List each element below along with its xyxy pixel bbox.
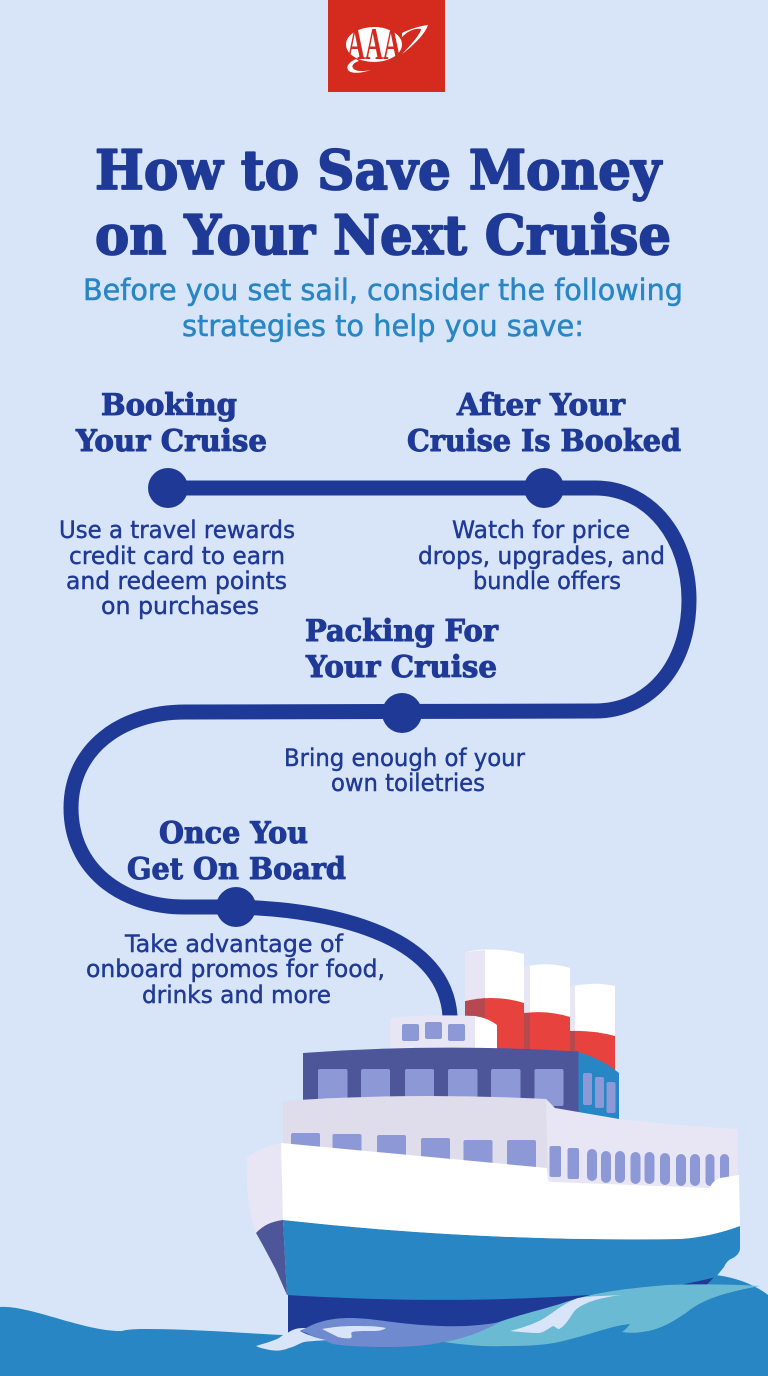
step 2: after your cruise is booked: Cruise Is Booked — [407, 423, 681, 458]
step 2: after your cruise is booked: Watch for price — [452, 516, 630, 544]
step 1: booking your cruise: Use a travel rewards — [59, 516, 295, 544]
subtitle: strategies to help you save: — [182, 309, 584, 343]
hull — [247, 1143, 740, 1340]
step 2: after your cruise is booked — [407, 387, 681, 595]
step 4: once you get on board: drinks and more — [142, 981, 331, 1009]
step 2: after your cruise is booked: bundle offers — [473, 567, 621, 595]
step 4: once you get on board: onboard promos for food, — [86, 955, 385, 983]
AAA logo: AAA — [347, 18, 401, 69]
AAA logo — [328, 0, 445, 92]
cruise ship — [247, 949, 740, 1340]
bridge cabin — [390, 1015, 497, 1050]
step 2: after your cruise is booked: drops, upgrades, and — [418, 542, 665, 570]
title: How to Save Money — [95, 138, 663, 202]
title — [95, 138, 671, 267]
step 3: packing for your cruise: Your Cruise — [305, 649, 497, 684]
step 4: once you get on board — [86, 815, 385, 1009]
step 1: booking your cruise: Your Cruise — [75, 423, 267, 458]
step 3: packing for your cruise: own toiletries — [331, 769, 485, 797]
step 4: once you get on board: Get On Board — [127, 851, 346, 886]
wave: teal — [444, 1284, 760, 1346]
promenade deck — [283, 1096, 738, 1190]
step 3: packing for your cruise: Packing For — [305, 613, 498, 648]
ocean waves — [0, 1275, 768, 1376]
wave: periwinkle — [301, 1318, 500, 1347]
subtitle: Before you set sail, consider the following — [83, 273, 683, 307]
step 4: once you get on board: Once You — [159, 815, 308, 850]
upper deck — [303, 1048, 619, 1120]
subtitle — [83, 273, 683, 343]
step 1: booking your cruise: and redeem points — [66, 567, 287, 595]
step 4: once you get on board: Take advantage of — [124, 930, 344, 958]
foam — [510, 1295, 622, 1333]
step 1: booking your cruise: credit card to earn — [69, 542, 285, 570]
step 1: booking your cruise: Booking — [101, 387, 237, 422]
step 3: packing for your cruise — [284, 613, 525, 797]
funnels — [465, 949, 615, 1075]
title: on Your Next Cruise — [95, 203, 671, 267]
step 1: booking your cruise — [59, 387, 295, 620]
step 3: packing for your cruise: Bring enough of your — [284, 744, 525, 772]
step 2: after your cruise is booked: After Your — [456, 387, 625, 422]
step 1: booking your cruise: on purchases — [101, 592, 259, 620]
route line — [71, 488, 689, 1016]
